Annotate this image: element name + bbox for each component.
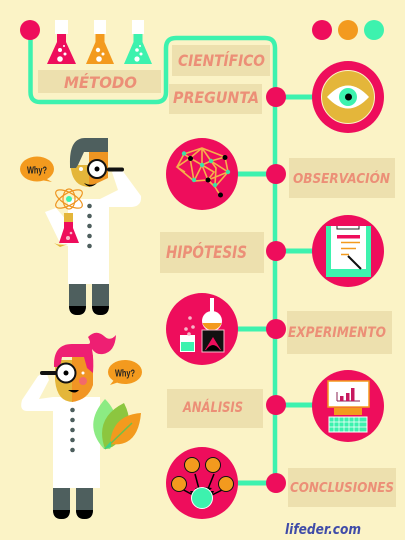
- watermark: lifeder.com: [285, 522, 361, 538]
- label: análisis: ANÁLISIS: [182, 399, 243, 416]
- magnifier: [88, 160, 124, 178]
- branch lines: [230, 97, 320, 483]
- speech bubble: [20, 156, 54, 182]
- label: hipótesis: HIPÓTESIS: [166, 241, 247, 263]
- lab coat: [45, 170, 141, 284]
- icon: computer: [312, 370, 384, 442]
- icon: clipboard: [312, 215, 384, 287]
- connector line: [30, 30, 275, 483]
- head: [55, 355, 93, 402]
- speech bubble: Why?: [115, 368, 135, 380]
- icon: atom: [53, 186, 85, 212]
- label: conclusiones: CONCLUSIONES: [290, 481, 394, 496]
- junction nodes: [266, 87, 286, 493]
- label: pregunta: [169, 84, 262, 114]
- start dot: [20, 20, 40, 40]
- label: conclusiones: [288, 468, 396, 507]
- icon: brain network: [166, 138, 238, 210]
- speech bubble: [108, 360, 142, 385]
- buttons: [70, 408, 75, 452]
- head: [70, 138, 108, 187]
- icon: converging circles: [166, 447, 238, 519]
- label: observación: [289, 158, 395, 198]
- icon: green flask: [124, 20, 152, 64]
- icon: eye: [312, 61, 384, 133]
- label: científico: [172, 45, 270, 76]
- character: female scientist: [21, 333, 142, 519]
- label: científico: CIENTÍFICO: [178, 51, 265, 70]
- icon: experiment: [166, 293, 238, 365]
- flask in hand: [54, 213, 79, 247]
- icon: pink flask: [47, 20, 76, 64]
- icon: orange flask: [86, 20, 114, 64]
- label: pregunta: PREGUNTA: [173, 88, 259, 107]
- icon: leaves: [93, 399, 141, 449]
- label: experimento: EXPERIMENTO: [288, 325, 386, 341]
- legs: [69, 284, 109, 315]
- label: método: [38, 70, 161, 93]
- character: male scientist: [20, 138, 141, 315]
- buttons: [87, 204, 92, 248]
- magnifier: [40, 364, 84, 382]
- legs: [53, 488, 93, 519]
- colour dots: [312, 20, 384, 40]
- lab coat: [21, 371, 100, 488]
- label: hipótesis: [160, 232, 264, 273]
- speech bubble: Why?: [27, 166, 47, 176]
- label: observación: OBSERVACIÓN: [293, 171, 390, 187]
- label: análisis: [167, 389, 263, 428]
- label: experimento: [287, 311, 392, 354]
- label: método: MÉTODO: [64, 73, 137, 92]
- hair: [54, 333, 116, 373]
